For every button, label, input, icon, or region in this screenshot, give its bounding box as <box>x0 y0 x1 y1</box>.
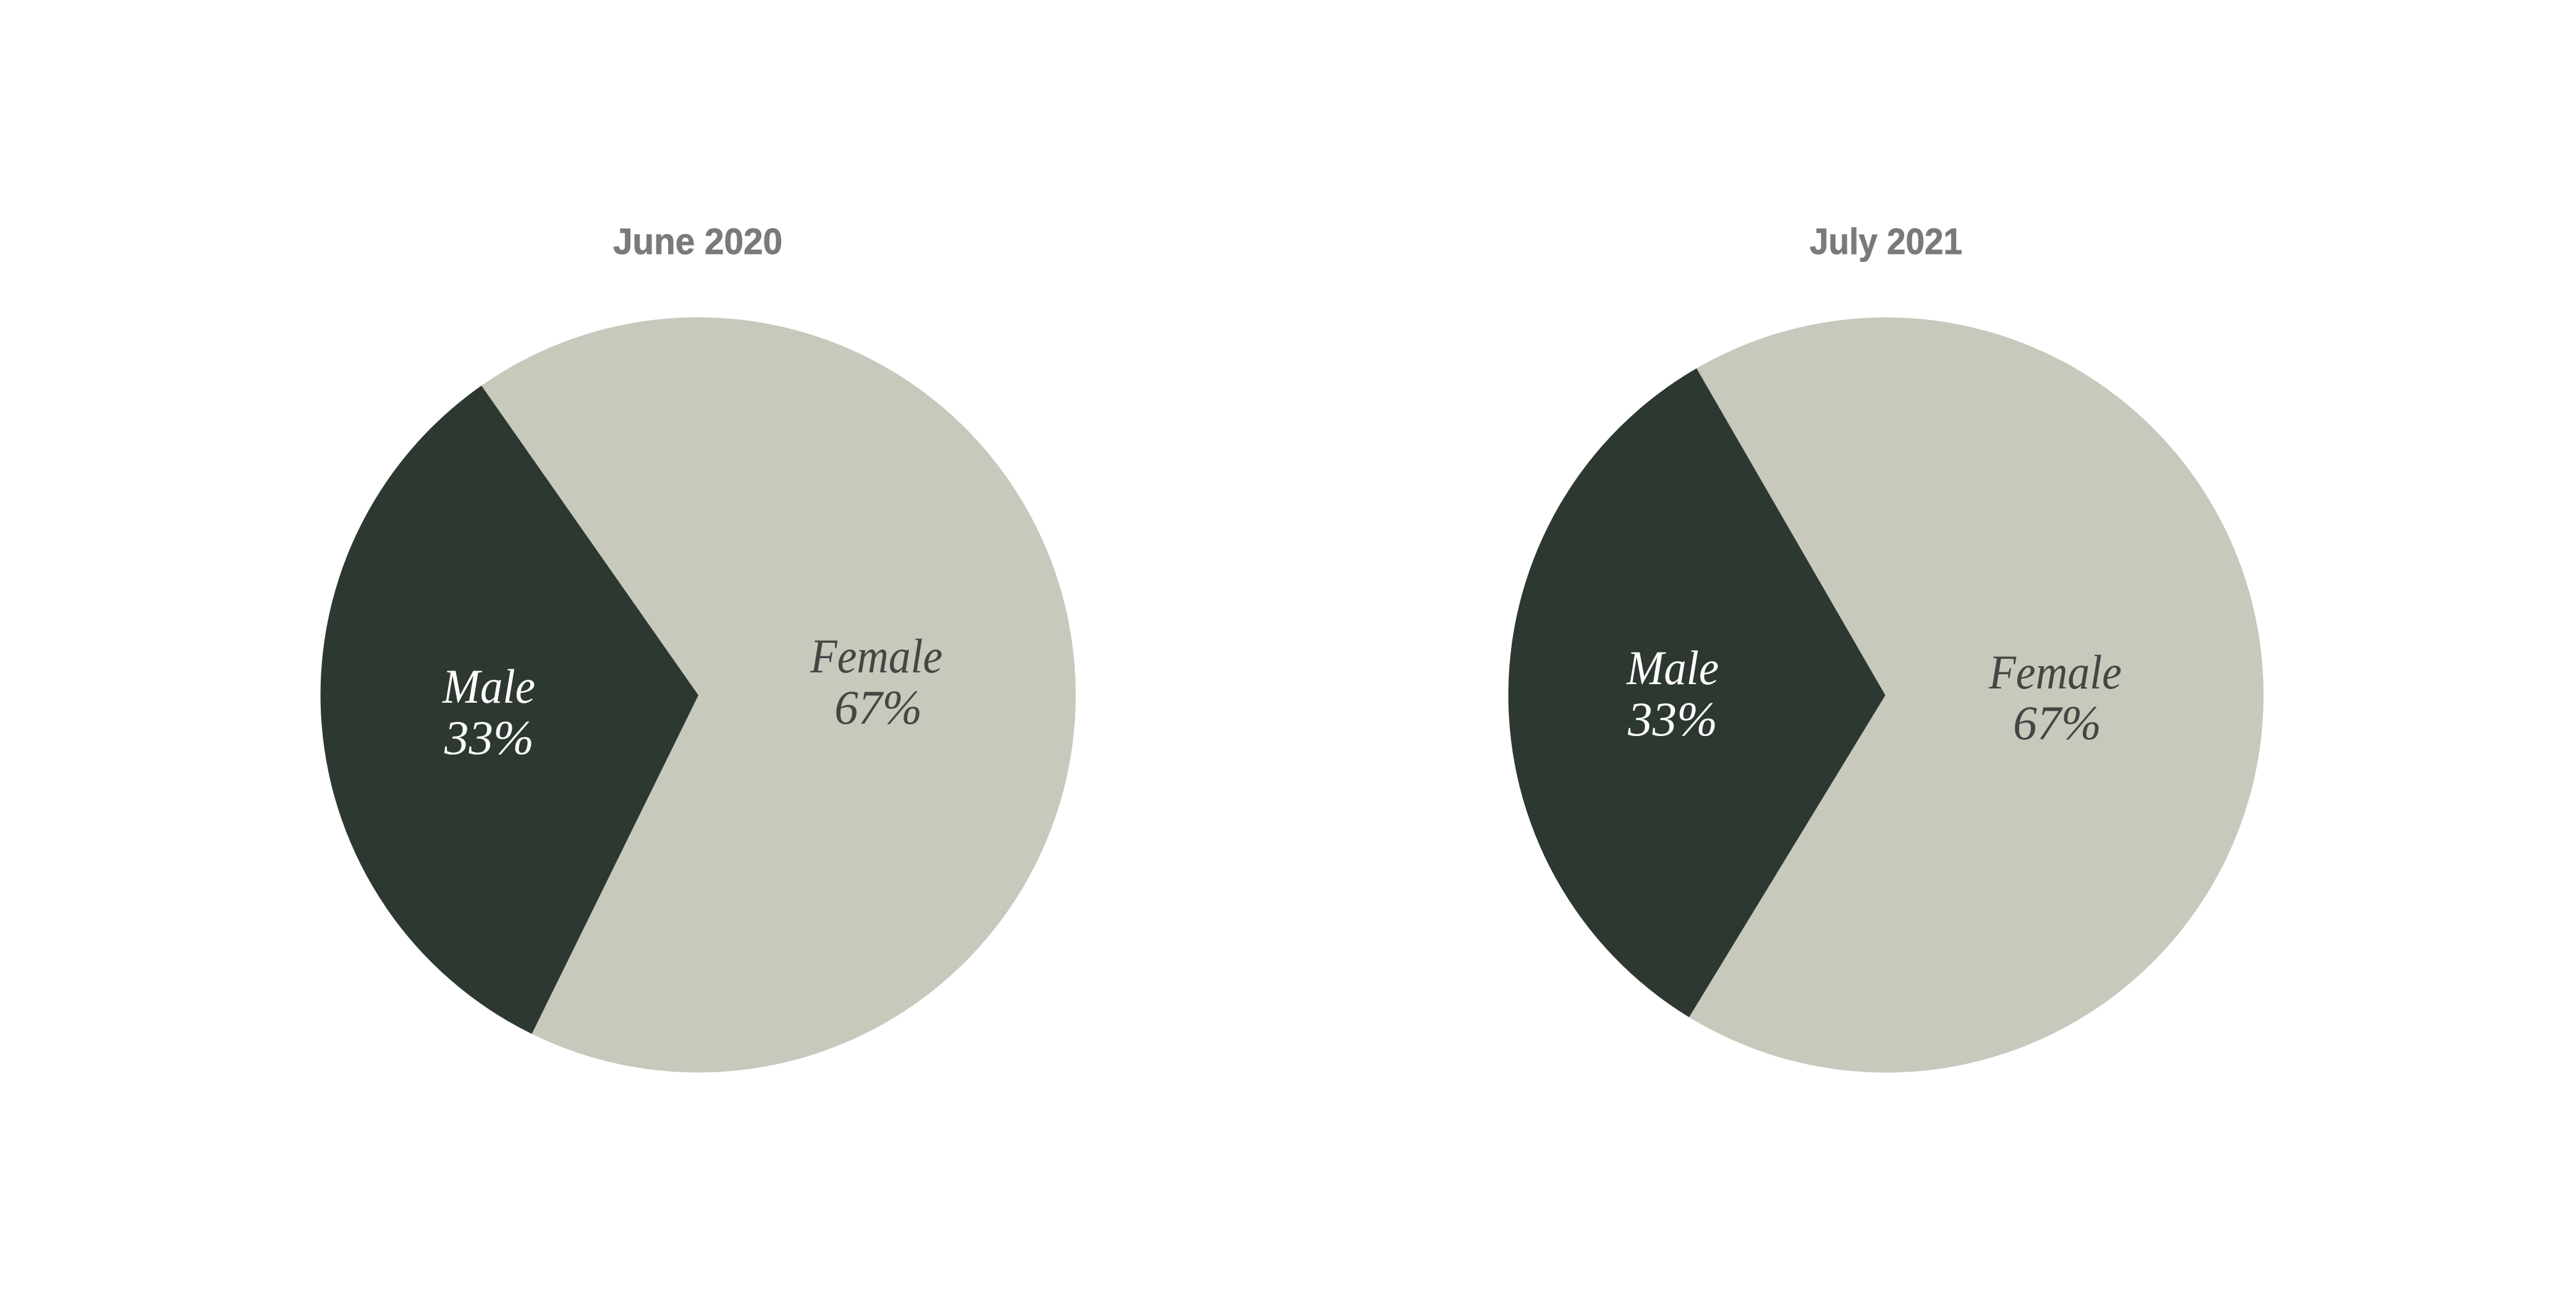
label: male 33% <box>442 659 535 764</box>
panel: July 2021 <box>1508 221 2263 1073</box>
pie slice: male 33% <box>321 386 698 1034</box>
label: female 67%: Female <box>810 629 943 683</box>
label: female 67%: Female <box>1988 645 2122 699</box>
label: male 33%: Male <box>442 659 535 713</box>
label: female 67%: 67% <box>2013 696 2101 750</box>
label: male 33%: 33% <box>1627 692 1718 746</box>
label: female 67% <box>1988 645 2122 750</box>
pie slice: female 67% <box>1689 318 2263 1073</box>
label: female 67%: 67% <box>834 680 922 734</box>
panel: June 2020 <box>321 221 1076 1072</box>
pie chart: June 2020 <box>321 317 1076 1072</box>
label: female 67% <box>810 629 943 734</box>
label: male 33%: Male <box>1626 641 1719 695</box>
pie slice: male 33% <box>1508 368 1885 1017</box>
heading: July 2021: July 2021 <box>1810 221 1962 262</box>
label: male 33%: 33% <box>444 711 534 764</box>
pie slice: female 67% <box>481 317 1076 1072</box>
heading: June 2020: June 2020 <box>613 221 782 262</box>
label: male 33% <box>1626 641 1719 746</box>
pie chart: July 2021 <box>1508 318 2263 1073</box>
